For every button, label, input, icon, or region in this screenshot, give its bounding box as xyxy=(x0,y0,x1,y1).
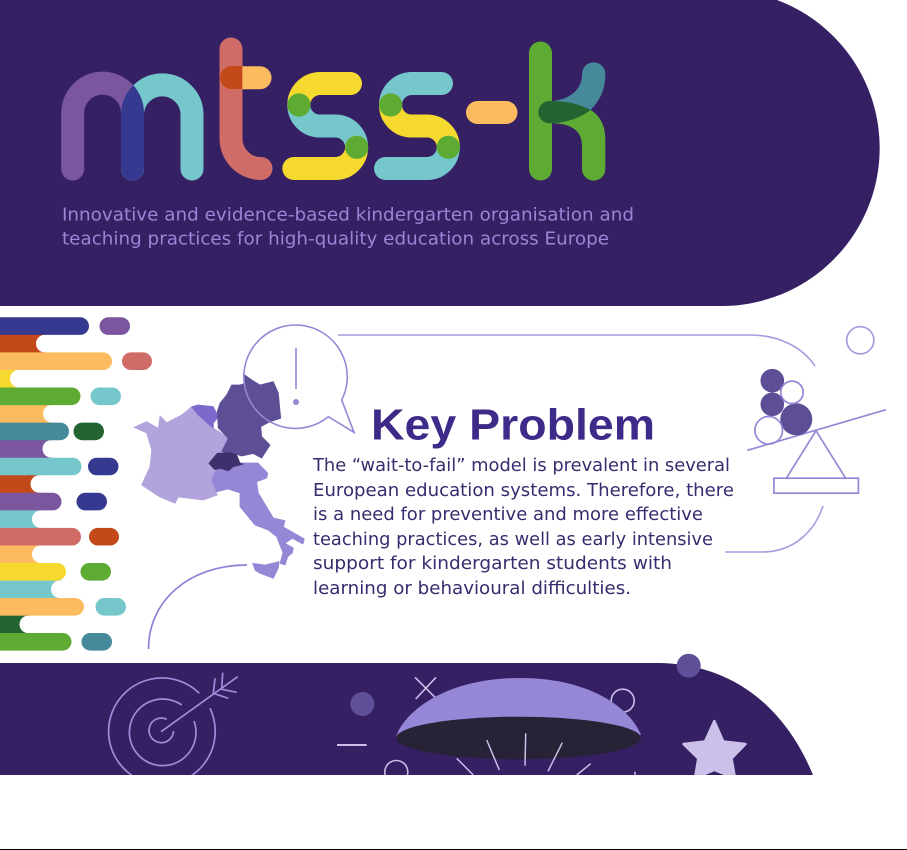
logo letter m xyxy=(73,83,192,169)
blank area below footer band xyxy=(0,775,907,849)
icon: target with arrow xyxy=(109,673,238,785)
logo letter s (second) xyxy=(379,84,460,169)
connector line top right xyxy=(338,335,815,366)
map of France, Belgium, Germany, Switzerland, Italy xyxy=(134,374,304,578)
body text: is a need for preventive and more effective xyxy=(313,504,703,525)
logo letter s (first) xyxy=(287,84,368,169)
icon: star xyxy=(684,721,746,778)
icon: filled circle xyxy=(350,692,374,716)
map: Italy xyxy=(212,463,304,565)
decorative colour stripes xyxy=(0,317,251,651)
logo hyphen xyxy=(478,101,506,124)
connector arc bottom left xyxy=(148,565,247,649)
icon: filled dot on band edge xyxy=(677,654,701,678)
map: Belgium xyxy=(192,405,218,428)
body text: teaching practices, as well as early intensive xyxy=(313,529,713,550)
icon: cross xyxy=(415,677,436,699)
heading: Key Problem: Key Problem xyxy=(371,400,655,450)
logo: mtss-k xyxy=(73,42,605,181)
body text: The “wait-to-fail” model is prevalent in several xyxy=(312,455,730,476)
subtitle: Innovative and evidence-based kindergarten organisation and xyxy=(62,204,634,226)
body text: European education systems. Therefore, there xyxy=(313,480,734,501)
body text: support for kindergarten students with xyxy=(313,553,672,574)
panel: footer band xyxy=(0,663,813,790)
icon: dash xyxy=(337,744,367,746)
panel: header band xyxy=(0,0,880,306)
subtitle: teaching practices for high-quality education across Europe xyxy=(62,228,609,250)
map: Germany xyxy=(217,374,281,458)
subtitle xyxy=(62,204,634,250)
icon: outlined circle left xyxy=(385,760,408,784)
icon: speech bubble with exclamation mark xyxy=(244,325,354,432)
icon: seesaw with balls xyxy=(747,369,886,493)
logo letter k xyxy=(529,42,605,181)
body text: learning or behavioural difficulties. xyxy=(313,578,631,599)
icon: outlined circle xyxy=(847,327,874,354)
bottom rule xyxy=(0,849,907,850)
icon: outlined circle right xyxy=(611,689,634,712)
body text xyxy=(312,455,734,599)
map: Sicily xyxy=(253,562,279,578)
logo letter t xyxy=(220,49,261,168)
connector line bottom right xyxy=(725,506,823,552)
map: Switzerland xyxy=(209,453,243,471)
map: France xyxy=(134,407,228,503)
illustration: dome with rays xyxy=(396,678,641,775)
